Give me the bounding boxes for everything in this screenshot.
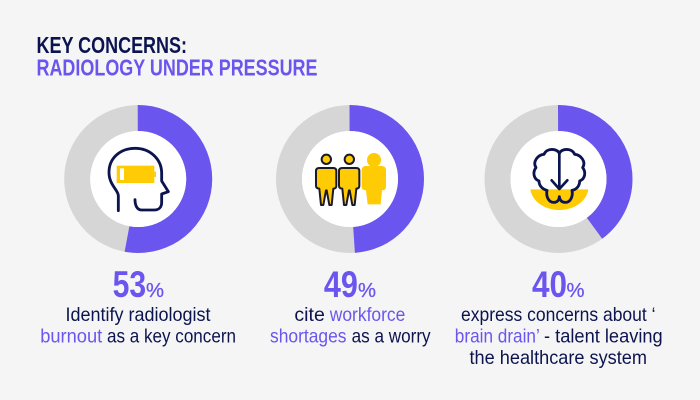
stat: 40%: % bbox=[566, 280, 585, 302]
description: burnout bbox=[40, 304, 236, 348]
title bbox=[36, 32, 318, 80]
description: workforce shortages: workforce bbox=[329, 304, 405, 326]
description: brain drain bbox=[455, 304, 663, 369]
description: burnout: burnout bbox=[40, 326, 103, 348]
description: burnout: Identify radiologist bbox=[66, 304, 211, 326]
donut chart: 40% bbox=[498, 118, 620, 240]
description: brain drain: the healthcare system bbox=[470, 347, 647, 369]
description: brain drain: brain drain’ bbox=[455, 326, 540, 348]
description: workforce shortages: cite bbox=[294, 304, 325, 326]
icon: head with low battery bbox=[109, 148, 168, 211]
icon: three people bbox=[316, 153, 386, 205]
stat: 40%: 40 bbox=[532, 264, 567, 305]
panel: brain drain bbox=[455, 118, 663, 369]
stat: 53%: 53 bbox=[113, 264, 146, 305]
title: RADIOLOGY UNDER PRESSURE bbox=[36, 54, 318, 80]
description: workforce shortages: shortages bbox=[270, 326, 347, 348]
description: workforce shortages: as a worry bbox=[352, 326, 431, 348]
donut chart: 53% bbox=[77, 118, 199, 240]
title: KEY CONCERNS: bbox=[36, 32, 187, 58]
icon: brain with downward arrow bbox=[530, 149, 588, 210]
stat: 49%: % bbox=[358, 280, 376, 302]
donut chart: 49% bbox=[289, 118, 411, 240]
description: brain drain: - talent leaving bbox=[544, 326, 663, 348]
description: burnout: as a key concern bbox=[107, 326, 236, 348]
panel: burnout bbox=[40, 118, 236, 348]
description: workforce shortages bbox=[270, 304, 431, 348]
description: brain drain: express concerns about ‘ bbox=[461, 304, 656, 326]
stat: 53%: % bbox=[146, 280, 164, 302]
stat: 49%: 49 bbox=[324, 264, 358, 305]
panel: workforce shortages bbox=[270, 118, 431, 348]
